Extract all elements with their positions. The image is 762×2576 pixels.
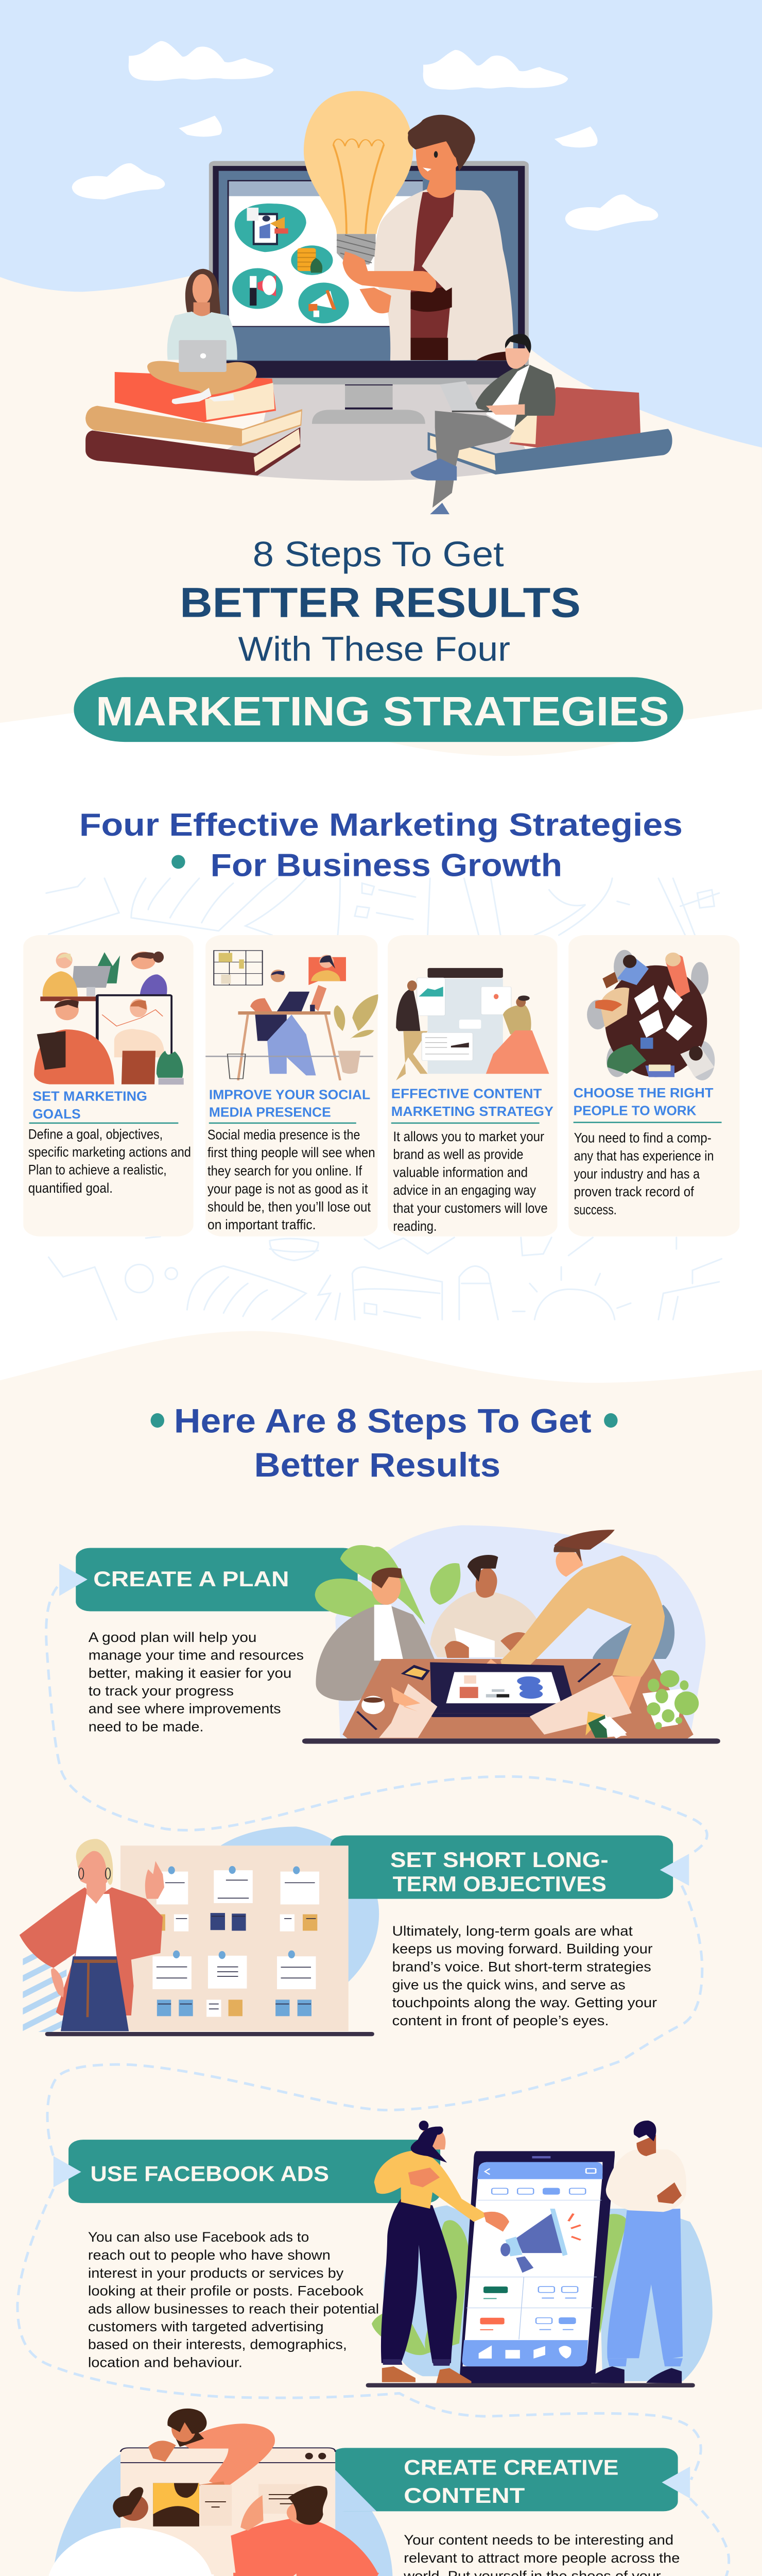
step text: manage your time and resources	[89, 1648, 304, 1663]
clouds	[72, 41, 658, 231]
step banner: CREATE A PLAN	[93, 1567, 289, 1591]
card text	[393, 1129, 548, 1234]
hero illustration	[85, 91, 672, 514]
card text: Social media presence is the	[207, 1127, 360, 1143]
illustration: team at computer	[34, 952, 184, 1084]
step text: Ultimately, long-term goals are what	[392, 1923, 633, 1939]
right books	[428, 387, 672, 474]
panel: step 3 use facebook ads	[54, 2121, 713, 2387]
card heading	[209, 1087, 370, 1120]
step text	[403, 2532, 680, 2576]
illustration: content board	[396, 968, 554, 1080]
card text: should be, then you’ll lose out	[207, 1199, 371, 1215]
card heading: CHOOSE THE RIGHT	[574, 1086, 714, 1100]
card text	[574, 1130, 714, 1218]
step text: give us the quick wins, and serve as	[392, 1977, 626, 1993]
step banner: SET SHORT LONG-	[390, 1848, 609, 1872]
illustration: person at laptop	[205, 951, 378, 1080]
step text: touchpoints along the way. Getting your	[392, 1995, 657, 2010]
card heading: MEDIA PRESENCE	[209, 1105, 331, 1120]
monitor	[209, 161, 529, 424]
panel: step 4 create creative content	[48, 2409, 690, 2576]
step text: better, making it easier for you	[89, 1666, 291, 1681]
card text	[207, 1127, 375, 1232]
card text: brand as well as provide	[393, 1147, 523, 1162]
card text: reading.	[393, 1218, 437, 1234]
illustration: round table from above	[587, 950, 715, 1080]
floor bar	[366, 2383, 695, 2387]
step text: customers with targeted advertising	[88, 2319, 324, 2334]
illustration: team around tablet	[315, 1530, 699, 1738]
step banner	[331, 2448, 690, 2511]
panel: step 2 short long-term objectives	[14, 1826, 689, 2042]
step text: Your content needs to be interesting and	[404, 2532, 673, 2548]
woman with laptop	[147, 269, 256, 404]
illustration: woman presenting board	[14, 1839, 349, 2042]
card text	[28, 1127, 191, 1196]
step text: You can also use Facebook ads to	[88, 2229, 309, 2245]
panel: effective content marketing strategy	[388, 935, 558, 1236]
step text: based on their interests, demographics,	[88, 2337, 347, 2352]
section heading: 8 steps	[151, 1402, 618, 1484]
step text: need to be made.	[89, 1719, 203, 1735]
step banner	[59, 1548, 358, 1612]
step banner: USE FACEBOOK ADS	[91, 2162, 329, 2186]
card heading: PEOPLE TO WORK	[574, 1104, 696, 1118]
step text: ads allow businesses to reach their potential	[88, 2301, 379, 2317]
card heading: MARKETING STRATEGY	[391, 1104, 553, 1118]
card heading	[391, 1086, 553, 1118]
section heading: 8 steps: Better Results	[254, 1446, 500, 1484]
card heading: EFFECTIVE CONTENT	[391, 1086, 542, 1101]
card heading	[574, 1086, 714, 1118]
card text: It allows you to market your	[393, 1129, 544, 1144]
section heading: four strategies: For Business Growth	[211, 847, 562, 883]
step banner	[331, 1836, 689, 1899]
step banner	[54, 2140, 440, 2203]
step text: brand’s voice. But short-term strategies	[392, 1959, 651, 1975]
card text: valuable information and	[393, 1165, 528, 1180]
step text: interest in your products or services by	[88, 2265, 343, 2281]
card text: that your customers will love	[393, 1200, 548, 1216]
panel: improve your social media presence	[205, 935, 378, 1236]
title line 2: BETTER RESULTS	[180, 579, 581, 626]
card heading: SET MARKETING	[32, 1089, 147, 1104]
illustration lower half	[48, 2573, 379, 2576]
left books	[85, 372, 302, 476]
card text: quantified goal.	[28, 1180, 113, 1196]
step banner: CONTENT	[404, 2484, 525, 2507]
step text: reach out to people who have shown	[88, 2247, 331, 2263]
card text: specific marketing actions and	[28, 1144, 191, 1160]
card text: on important traffic.	[207, 1217, 316, 1232]
illustration: phone with megaphone	[372, 2121, 713, 2384]
card heading: IMPROVE YOUR SOCIAL	[209, 1087, 370, 1102]
ground shadow	[195, 383, 534, 481]
panel: step 1 create a plan	[59, 1525, 720, 1744]
step banner: CREATE CREATIVE	[404, 2455, 618, 2480]
card text: they search for you online. If	[207, 1163, 362, 1179]
lightbulb	[304, 91, 413, 264]
dashed connector path	[18, 1587, 738, 2576]
floor bar	[302, 1738, 720, 1744]
step text: content in front of people’s eyes.	[392, 2013, 609, 2029]
card heading	[32, 1089, 147, 1121]
doodle background	[46, 878, 722, 1319]
section heading: four strategies	[79, 807, 683, 883]
step text: A good plan will help you	[89, 1630, 256, 1645]
step text: looking at their profile or posts. Facebook	[88, 2283, 363, 2299]
illustration: team editing web page	[48, 2409, 378, 2576]
title line 3: With These Four	[238, 630, 510, 668]
step text: location and behaviour.	[88, 2355, 243, 2370]
step text	[88, 2229, 379, 2370]
step text: to track your progress	[89, 1683, 234, 1699]
card text: advice in an engaging way	[393, 1182, 536, 1198]
panel: choose the right people to work	[568, 935, 739, 1236]
card text: Plan to achieve a realistic,	[28, 1162, 167, 1178]
card heading: GOALS	[32, 1107, 81, 1121]
step banner: TERM OBJECTIVES	[393, 1872, 607, 1896]
title pill	[74, 677, 683, 742]
panel: set marketing goals	[23, 935, 194, 1236]
step text	[89, 1630, 304, 1735]
step text: keeps us moving forward. Building your	[392, 1941, 653, 1957]
man with tablet	[411, 334, 556, 514]
step text: and see where improvements	[89, 1701, 281, 1717]
illustration background blob	[335, 1525, 705, 1738]
card text: your page is not as good as it	[207, 1181, 368, 1197]
floor bar	[45, 2032, 374, 2036]
card text: Define a goal, objectives,	[28, 1127, 163, 1142]
illustration background blob	[53, 2453, 393, 2576]
card text: first thing people will see when	[207, 1145, 375, 1161]
illustration background blob	[221, 1826, 379, 1989]
presenter	[342, 115, 513, 361]
card text: success.	[574, 1202, 617, 1218]
title	[74, 535, 683, 742]
title line 1: 8 Steps To Get	[253, 535, 504, 574]
screen icons	[232, 204, 349, 324]
step text	[392, 1923, 657, 2029]
section heading: 8 steps: Here Are 8 Steps To Get	[174, 1402, 592, 1440]
